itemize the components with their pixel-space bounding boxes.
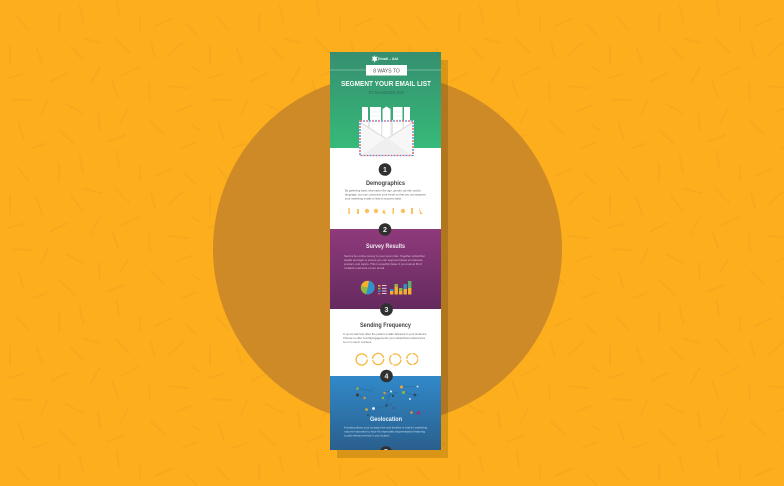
section 3 body text: so on to opt-in numbers. — [343, 340, 372, 344]
section 3 body text — [343, 333, 427, 344]
number badge 4 — [380, 370, 393, 382]
section 1 body text — [345, 190, 426, 200]
section 4 body text: Knowing where your contacts live and breathe is vital for marketing — [344, 426, 427, 430]
number badge 5: 5 — [384, 449, 388, 456]
icons: frequency rings — [356, 353, 418, 365]
icon: open envelope — [359, 106, 414, 156]
section 1: demographics — [330, 148, 441, 230]
header panel — [330, 52, 441, 149]
title: SEGMENT YOUR EMAIL LIST — [341, 79, 431, 88]
section 4 body text: Locally-relevant services in your location. — [344, 434, 390, 438]
map with location dots — [356, 386, 420, 416]
infographic card — [330, 52, 441, 459]
bar chart — [390, 281, 411, 294]
number badge 3 — [380, 303, 393, 316]
number badge 5 — [380, 446, 392, 450]
section 2 body text: details and logic to ensure you can segment based on interests, — [344, 258, 423, 262]
number badge 3: 3 — [385, 307, 389, 314]
pie chart — [361, 281, 375, 294]
section 2: survey results — [330, 229, 441, 310]
section 3 body text: In op-ins ask how often the prefers emails delivered to your audience. — [343, 332, 427, 336]
section 2 heading: Survey Results — [366, 244, 406, 250]
section 4 body text — [344, 426, 427, 437]
heading badge: 8 WAYS TO — [373, 68, 400, 74]
section 2 body text: multiple interests on an email. — [344, 266, 385, 270]
section 4: geolocation — [330, 376, 441, 450]
section 4 body text: may be important to how it's especially segmentation featuring — [344, 430, 425, 434]
section 1 body text: By gathering basic information like age, gender, job title, and/or — [345, 188, 421, 192]
section 1 body text: language, you can customize your email so that you can segment — [345, 192, 426, 196]
section 3 body text: Choose to offer monthly/egagements your subscribers preferences — [343, 336, 426, 340]
section 2 body text — [344, 254, 425, 270]
number badge 2: 2 — [383, 227, 387, 234]
brand logo: Email→Aid — [378, 57, 399, 61]
section 4 heading: Geolocation — [370, 417, 402, 423]
number badge 1 — [379, 163, 391, 176]
number badge 4: 4 — [385, 374, 389, 380]
section 3 heading: Sending Frequency — [360, 323, 412, 329]
section 1 body text: your marketing emails to lead to success faster. — [345, 196, 402, 200]
number badge 1: 1 — [383, 167, 387, 174]
number badge 2 — [379, 223, 391, 236]
section 2 body text: product, and topics. This is possibly faster if you look at lift of — [344, 262, 422, 266]
icons: people row — [348, 207, 423, 214]
card drop shadow — [337, 60, 448, 458]
section 2 body text: Send a fun online survey to your opt-in lists. Together subscriber — [344, 254, 425, 258]
section 1 heading: Demographics — [366, 181, 406, 187]
subtitle: TO MAXIMIZE ROI — [368, 90, 404, 95]
section 3: sending frequency — [330, 309, 441, 377]
chart legend — [378, 285, 386, 294]
large background circle — [213, 74, 562, 424]
